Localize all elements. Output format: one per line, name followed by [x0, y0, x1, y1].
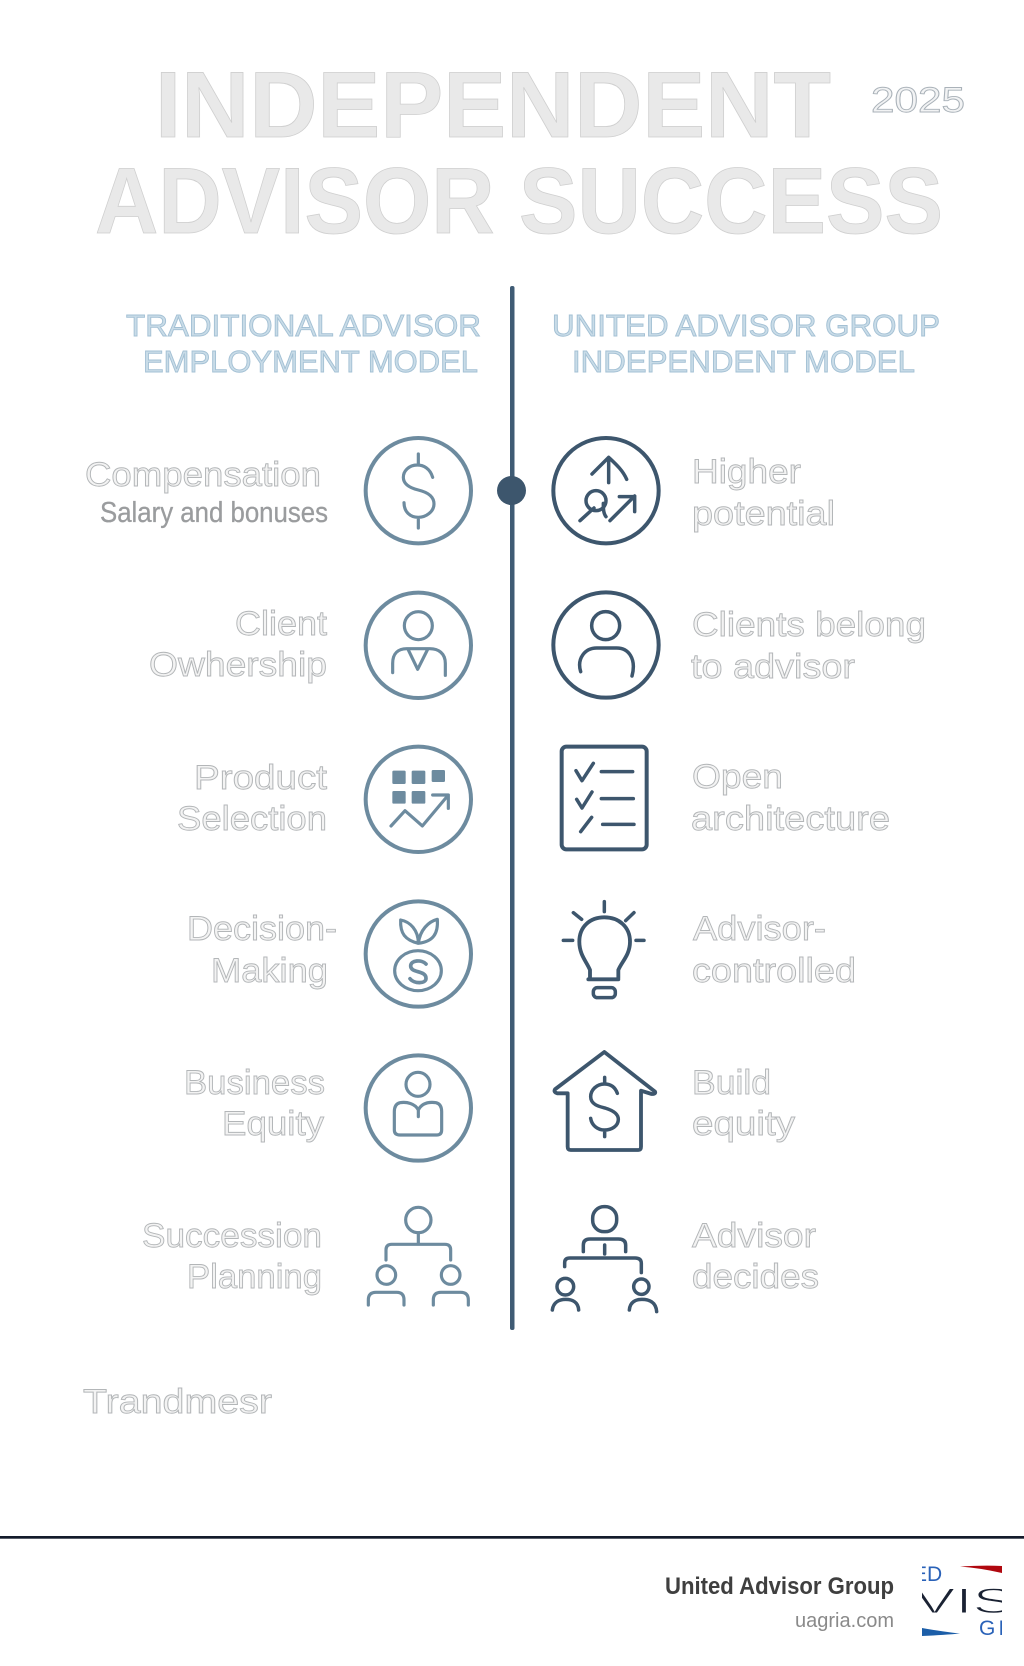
icon: suited person circle: [366, 593, 471, 698]
row 1 label: compensation: [85, 456, 328, 529]
row 2 right label: Clients belong: [692, 606, 926, 644]
footer brand text: uagria.com: [795, 1610, 894, 1632]
row 4 label: decision-making: Decision-: [187, 910, 337, 948]
logo: GI: [979, 1617, 1007, 1640]
row 2 right label: to advisor: [691, 648, 855, 686]
row 1 label: compensation: Compensation: [85, 456, 321, 494]
timeline dot: [497, 476, 526, 505]
logo: ED: [913, 1563, 942, 1586]
title: [95, 52, 943, 253]
row 3 right label: Open: [692, 758, 783, 796]
row 6 right label: [692, 1217, 819, 1296]
row 6 label: succession planning: Succession: [142, 1217, 322, 1255]
icon: light bulb: [563, 902, 644, 998]
heading: independent model: INDEPENDENT MODEL: [572, 344, 915, 379]
icon: product grid chart circle: [366, 747, 471, 852]
row 6 right label: decides: [692, 1258, 819, 1296]
row 2 label: client ownership: [149, 605, 328, 684]
row 5 right label: [692, 1064, 795, 1143]
row 5 label: business equity: Business: [184, 1064, 325, 1102]
row 4 right label: controlled: [692, 952, 856, 990]
icon: plant coin circle: [366, 901, 471, 1007]
row 5 right label: equity: [692, 1105, 795, 1143]
row 3 right label: [691, 758, 890, 838]
row 6 label: succession planning: [142, 1217, 322, 1296]
row 1 right label: [692, 453, 835, 533]
footer divider: [0, 1536, 1024, 1539]
row 2 label: client ownership: Client: [235, 605, 328, 643]
logo: VIS: [914, 1582, 1014, 1621]
row 3 label: product selection: [177, 759, 328, 838]
icon: person circle: [553, 592, 659, 698]
year label: 2025: [871, 81, 965, 120]
heading: traditional model: TRADITIONAL ADVISOR: [126, 308, 481, 343]
title: INDEPENDENT: [155, 52, 831, 157]
row 1 right label: Higher: [692, 453, 801, 491]
footer brand text: United Advisor Group: [665, 1573, 894, 1600]
icon: hierarchy: [368, 1207, 468, 1305]
row 4 label: decision-making: [187, 910, 337, 990]
icon: checklist: [562, 747, 647, 849]
title: ADVISOR SUCCESS: [95, 148, 943, 253]
icon: house with dollar: [555, 1052, 655, 1150]
row 5 label: business equity: Equity: [222, 1105, 324, 1143]
footer brand text: [665, 1573, 894, 1632]
heading: independent model: UNITED ADVISOR GROUP: [552, 308, 940, 343]
heading: traditional model: [126, 308, 481, 379]
logo: [922, 1566, 1002, 1636]
row 1 right label: potential: [692, 495, 835, 533]
icon: dollar circle: [366, 438, 471, 543]
heading: traditional model: EMPLOYMENT MODEL: [143, 344, 478, 379]
row 2 right label: [691, 606, 926, 686]
icon: higher potential: [553, 438, 659, 543]
row 6 label: succession planning: Planning: [187, 1258, 322, 1296]
row 4 right label: Advisor-: [693, 910, 826, 948]
icon: advisor hierarchy: [552, 1207, 657, 1312]
center divider line: [510, 286, 514, 1330]
row 5 label: business equity: [184, 1064, 325, 1143]
row 4 right label: [692, 910, 856, 990]
row 6 right label: Advisor: [692, 1217, 816, 1255]
footnote word: Trandmesr: [83, 1383, 272, 1421]
heading: independent model: [552, 308, 940, 379]
row 2 label: client ownership: Owhership: [149, 646, 327, 684]
row 1 label: compensation: Salary and bonuses: [100, 497, 328, 529]
row 3 right label: architecture: [691, 800, 890, 838]
row 5 right label: Build: [692, 1064, 771, 1102]
row 3 label: product selection: Product: [194, 759, 328, 797]
icon: person with book circle: [366, 1055, 471, 1161]
row 4 label: decision-making: Making: [211, 952, 328, 990]
row 3 label: product selection: Selection: [177, 800, 327, 838]
